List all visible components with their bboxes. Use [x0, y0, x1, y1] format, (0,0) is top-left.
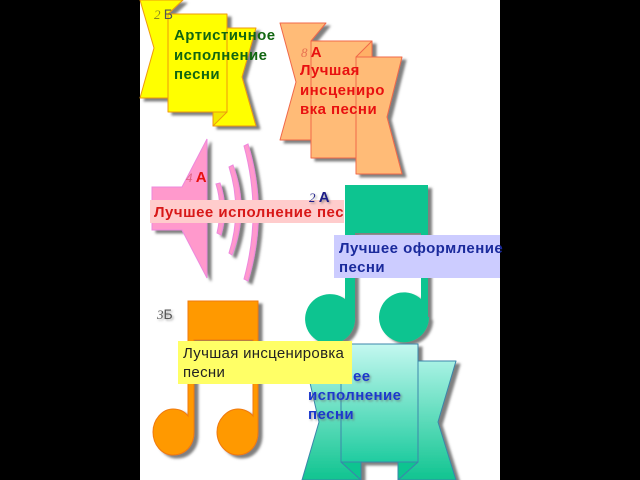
class label 2 А: 2 А [309, 189, 330, 206]
text: performance of a song: ее [353, 368, 371, 385]
text: best staging of a song: вка песни [300, 101, 377, 118]
text: performance of a song: песни [308, 406, 354, 423]
label: best staging of a song [178, 341, 352, 384]
panel: teal note, best song design [305, 185, 503, 344]
text: artistic performance of a song: исполнение [174, 47, 267, 64]
panel: yellow ribbon, artistic performance [140, 0, 276, 126]
text: best staging of a song: инсцениро [300, 82, 385, 99]
class label 4 А: 4 А [186, 169, 207, 186]
label: best performance of a song: Лучшее исполнение пес [154, 204, 344, 221]
class label 2 Б: 2 Б [154, 6, 173, 22]
text: artistic performance of a song: Артистичное [174, 27, 276, 44]
icon: yellow ribbon [140, 0, 256, 126]
white slide background [140, 0, 500, 480]
panel: pink speaker, best song performance [150, 139, 344, 281]
text: artistic performance of a song: песни [174, 66, 220, 83]
text: best staging of a song: Лучшая [300, 62, 360, 79]
icon: speaker with sound waves [152, 139, 258, 281]
icon: teal ribbon [302, 344, 456, 480]
label: best staging of a song: Лучшая инсценировка [183, 345, 345, 362]
label: best song design: Лучшее оформление [339, 240, 503, 257]
icon: orange music notes [153, 301, 258, 455]
panel: orange note, best staging [153, 301, 352, 455]
panel: teal ribbon, performance of a song [302, 344, 456, 480]
label: best song design: песни [339, 259, 385, 276]
text: performance of a song: исполнение [308, 387, 401, 404]
class label 3 Б: 3Б [156, 306, 173, 322]
icon: orange ribbon [280, 23, 402, 174]
icon: teal music notes [305, 185, 429, 344]
label: best staging of a song: песни [183, 364, 225, 381]
label: best song design [334, 235, 503, 278]
panel: orange ribbon, best staging [280, 23, 402, 174]
class label 8 А: 8 А [301, 44, 322, 61]
